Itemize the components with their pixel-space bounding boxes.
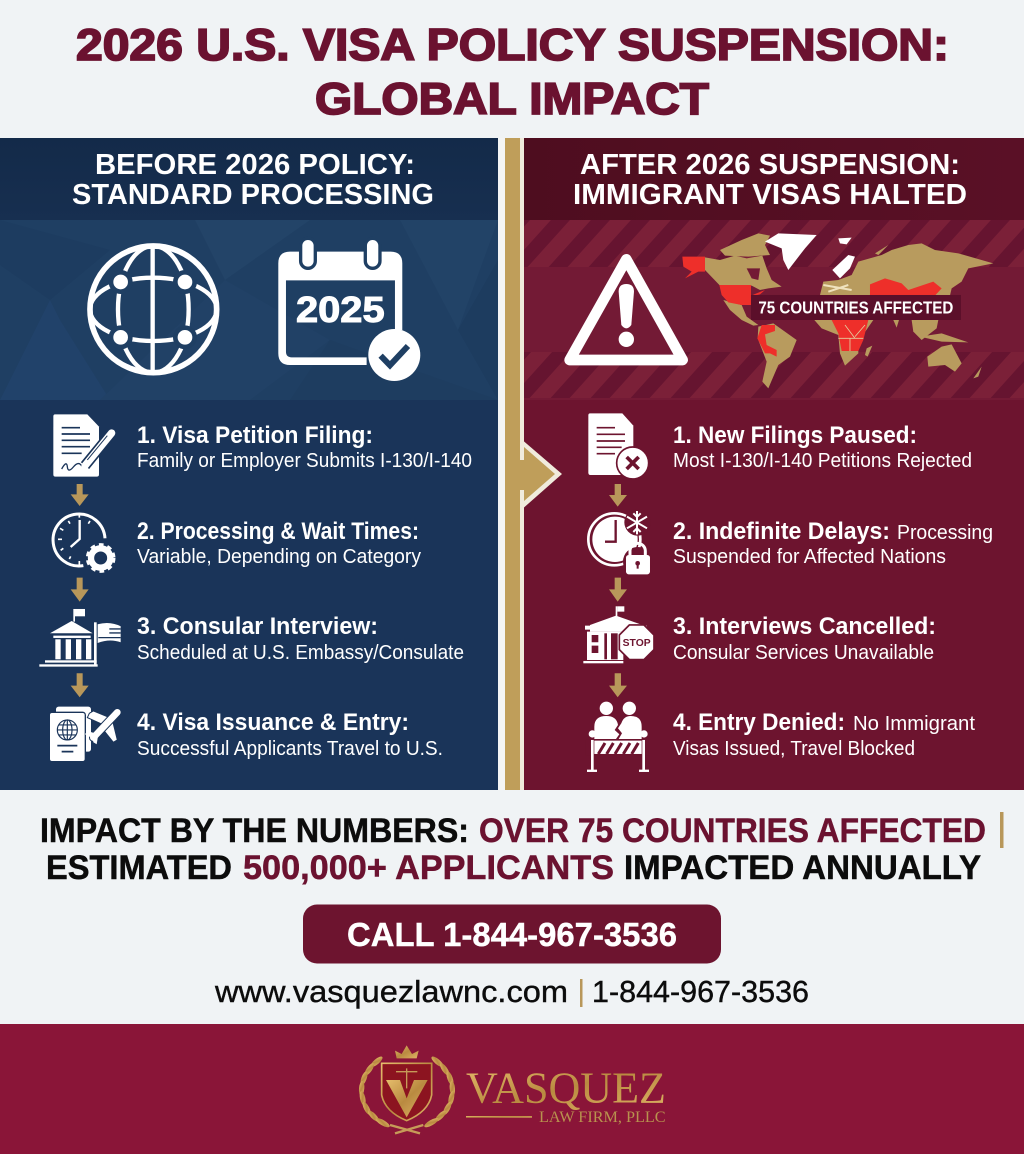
step 1 text: 1. Visa Petition Filing: <box>137 422 373 449</box>
logo wordmark: LAW FIRM, PLLC <box>539 1109 666 1126</box>
step 1 text: Most I-130/I-140 Petitions Rejected <box>673 449 972 472</box>
step 4 text: 4. Visa Issuance & Entry: <box>137 709 409 736</box>
impact by the numbers: IMPACT BY THE NUMBERS: <box>40 812 469 850</box>
icon: closed consulate with stop sign: STOP <box>623 638 651 649</box>
icon: calendar 2025 with check <box>278 238 420 381</box>
website and phone <box>214 974 809 1009</box>
icon: calendar 2025 with check: 2025 <box>296 289 385 330</box>
step 3 text: Consular Services Unavailable <box>673 641 934 664</box>
step 1 text <box>137 422 472 472</box>
step 2 text: Suspended for Affected Nations <box>673 545 946 568</box>
logo crest <box>358 1045 456 1133</box>
step 1 text: Family or Employer Submits I-130/I-140 <box>137 449 472 472</box>
title: GLOBAL IMPACT <box>315 75 709 124</box>
icon: closed consulate with stop sign <box>583 606 654 663</box>
center divider with arrow <box>498 138 524 790</box>
arrow <box>609 578 627 602</box>
icon: clock and gear <box>53 514 114 571</box>
step 4 text: 4. Entry Denied: <box>673 709 845 736</box>
step 3 text: 3. Interviews Cancelled: <box>673 613 936 640</box>
logo: Vasquez Law Firm <box>358 1045 666 1133</box>
icon: embassy with flag <box>39 609 121 667</box>
arrow <box>609 673 627 697</box>
step 3 text: Scheduled at U.S. Embassy/Consulate <box>137 641 464 664</box>
icon band with low-poly background <box>0 220 498 400</box>
icon: document with x <box>588 413 649 479</box>
map label: 75 countries affected <box>751 295 961 320</box>
icon: separated people and barrier <box>586 702 649 772</box>
panel heading: after <box>524 138 1024 220</box>
logo wordmark: VASQUEZ <box>466 1064 666 1113</box>
step 2 text: Variable, Depending on Category <box>137 545 422 568</box>
striped band background <box>524 220 1024 400</box>
step 4 text <box>137 709 443 760</box>
world map <box>682 233 993 388</box>
panel heading: after: IMMIGRANT VISAS HALTED <box>573 179 967 211</box>
arrow <box>71 578 89 602</box>
step 4 text <box>673 709 975 760</box>
step 4 text: Visas Issued, Travel Blocked <box>673 737 915 760</box>
panel: before 2026 policy <box>0 138 498 790</box>
arrow: divider pointer <box>505 438 562 511</box>
step icons: after <box>583 413 654 772</box>
icon: clock with snowflake and lock <box>588 509 652 576</box>
arrow <box>71 484 89 506</box>
step 1 text <box>673 422 972 472</box>
panel heading: before: BEFORE 2026 POLICY: <box>95 149 415 181</box>
step 4 text: No Immigrant <box>853 712 975 735</box>
icon: petition document <box>53 414 112 477</box>
step 2 text: Processing <box>897 521 993 544</box>
step 3 text <box>137 613 464 664</box>
impact by the numbers: IMPACTED ANNUALLY <box>624 849 981 887</box>
step 3 text: 3. Consular Interview: <box>137 613 378 640</box>
panel heading: before: STANDARD PROCESSING <box>72 179 434 211</box>
panel heading: after: AFTER 2026 SUSPENSION: <box>580 149 960 181</box>
website and phone: 1-844-967-3536 <box>592 974 809 1009</box>
icon: passport and plane <box>49 707 117 762</box>
impact by the numbers <box>40 812 1004 887</box>
call button <box>303 904 721 964</box>
title: 2026 U.S. VISA POLICY SUSPENSION: <box>76 21 949 70</box>
panel heading: before <box>0 138 498 220</box>
step 2 text <box>673 518 993 568</box>
impact by the numbers: OVER 75 COUNTRIES AFFECTED <box>479 812 986 850</box>
title <box>76 21 949 124</box>
step 2 text: 2. Processing & Wait Times: <box>137 518 419 545</box>
step 2 text: 2. Indefinite Delays: <box>673 518 890 545</box>
icon: warning triangle <box>570 259 683 360</box>
icon: globe network <box>90 246 217 373</box>
arrow <box>71 673 89 697</box>
footer band <box>0 1024 1024 1154</box>
impact by the numbers: ESTIMATED <box>46 849 232 887</box>
impact by the numbers: 500,000+ APPLICANTS <box>243 849 614 887</box>
step 4 text: Successful Applicants Travel to U.S. <box>137 737 443 760</box>
step icons: before <box>39 414 121 762</box>
step 3 text <box>673 613 936 664</box>
call button: CALL 1-844-967-3536 <box>347 916 677 953</box>
step 1 text: 1. New Filings Paused: <box>673 422 917 449</box>
map label: 75 countries affected: 75 COUNTRIES AFFECTED <box>758 297 953 317</box>
step 2 text <box>137 518 422 568</box>
panel: after 2026 suspension <box>524 138 1024 790</box>
website and phone: www.vasquezlawnc.com <box>214 974 568 1009</box>
arrow <box>609 484 627 507</box>
